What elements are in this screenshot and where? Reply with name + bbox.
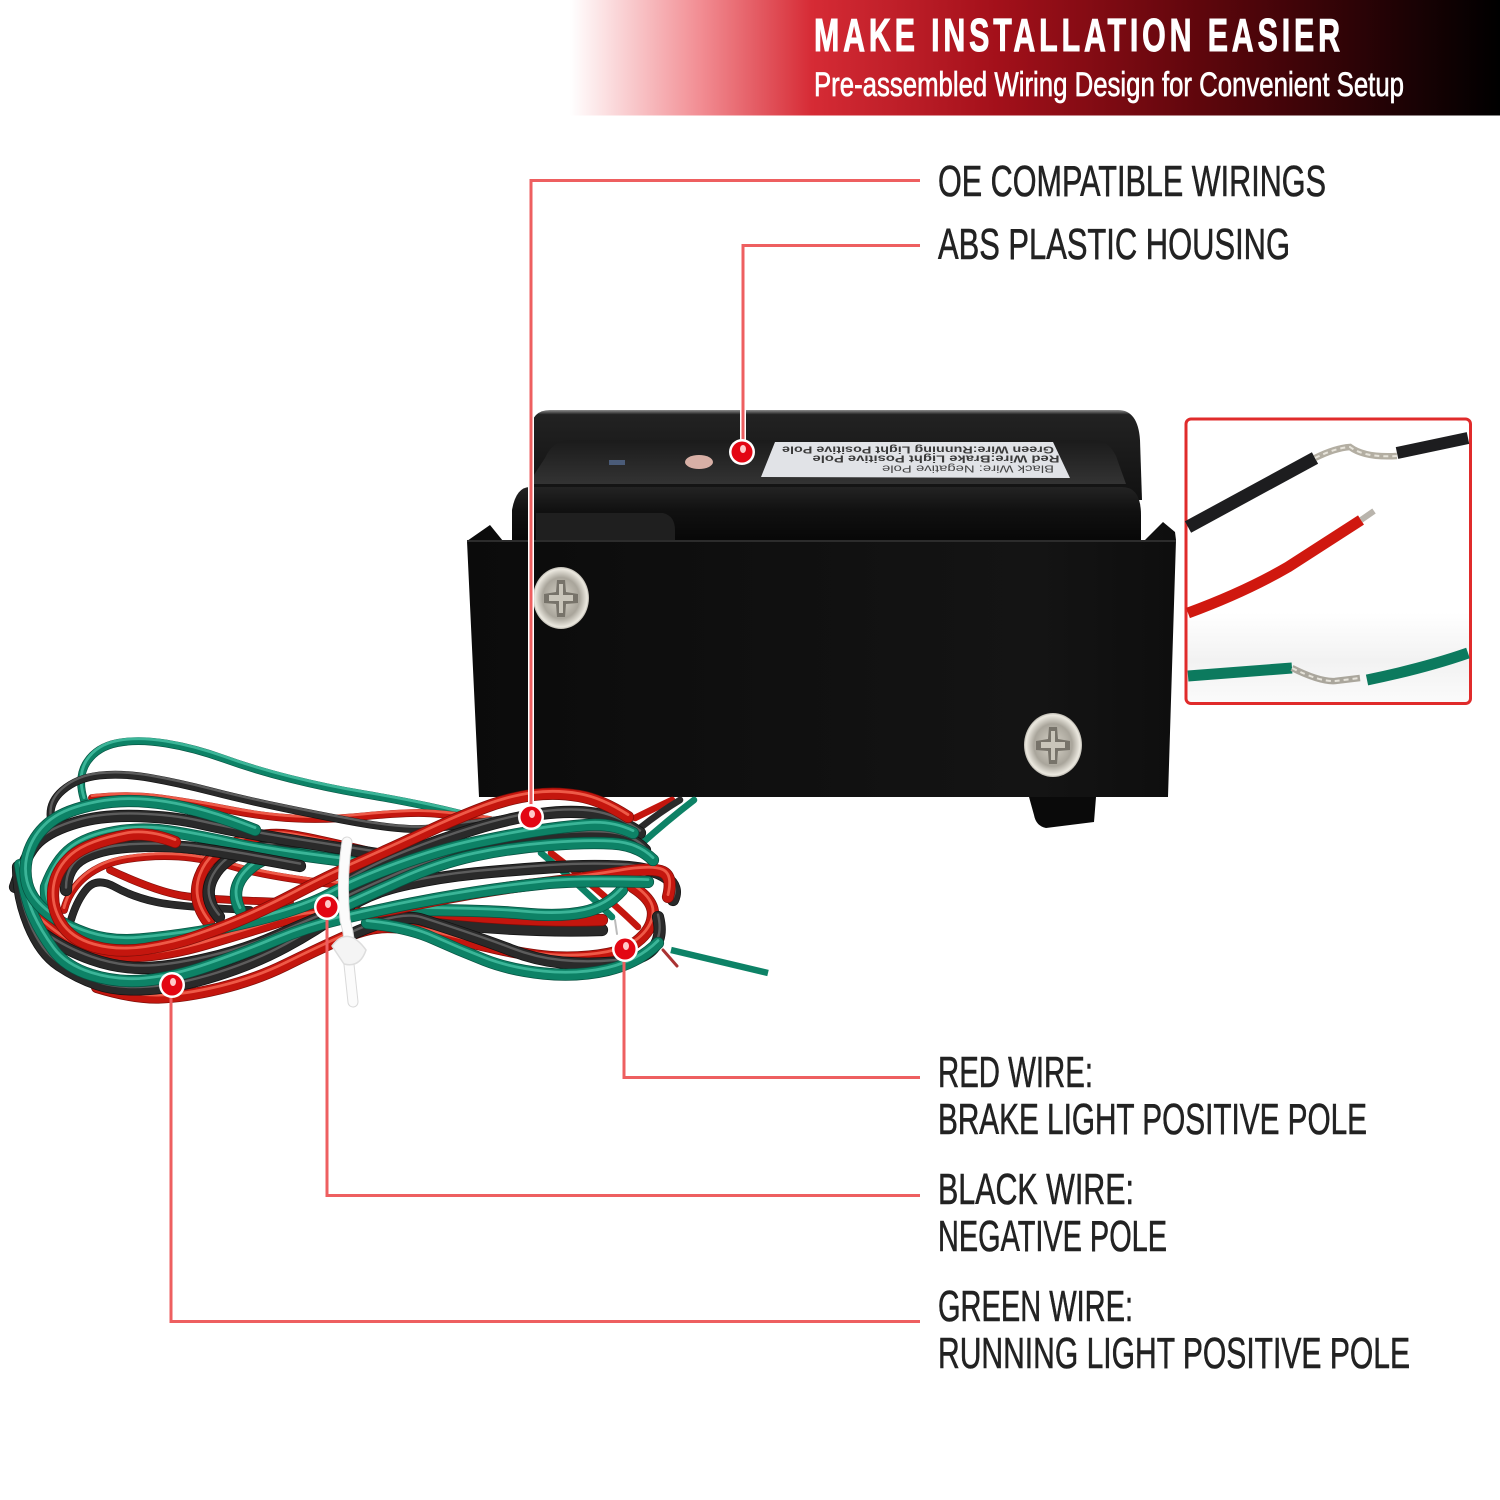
wiring label sticker xyxy=(761,442,1070,478)
white zip tie xyxy=(332,842,366,1002)
housing lower body xyxy=(512,487,1141,545)
leader line: ABS plastic housing xyxy=(743,246,920,452)
inset: stripped wire ends xyxy=(1186,419,1470,704)
red wire with tip xyxy=(1188,511,1374,613)
leader line: green wire xyxy=(171,985,920,1322)
housing top plate xyxy=(530,410,1142,500)
metal bracket front xyxy=(467,522,1176,797)
bracket top edge xyxy=(467,540,1176,542)
housing side tab xyxy=(536,513,675,545)
product: black plastic housing with metal bracket xyxy=(467,410,1176,828)
small blue tag xyxy=(609,460,625,465)
label: black wire: NEGATIVE POLE xyxy=(938,1212,1167,1261)
leader line: black wire xyxy=(327,907,920,1196)
label: green wire: GREEN WIRE: xyxy=(938,1282,1133,1331)
marker dot: green wire xyxy=(159,972,185,998)
leader line: OE compatible wirings xyxy=(531,180,920,817)
label: OE compatible wirings: OE COMPATIBLE WIRINGS xyxy=(938,157,1326,206)
marker dot: black wire xyxy=(314,894,340,920)
label: black wire xyxy=(938,1165,1167,1261)
housing lid xyxy=(528,440,1126,484)
marker dot: wirings xyxy=(518,804,544,830)
round sticker xyxy=(685,455,713,469)
screw left xyxy=(533,567,589,629)
green wire with stripped section xyxy=(1188,653,1468,681)
header banner xyxy=(570,0,1500,116)
wiring label sticker: Black Wire: Negative Pole xyxy=(882,462,1054,474)
screw right xyxy=(1024,713,1082,777)
label: green wire xyxy=(938,1282,1410,1378)
wiring label sticker: Green Wire:Running Light Positive Pole xyxy=(782,444,1054,456)
label: red wire xyxy=(938,1048,1367,1144)
label: red wire: RED WIRE: xyxy=(938,1048,1093,1097)
label: black wire: BLACK WIRE: xyxy=(938,1165,1134,1214)
black wire with stripped section xyxy=(1188,438,1468,527)
wiring label sticker: Red Wire:Brake Light Positive Pole xyxy=(812,452,1060,464)
marker dot: ABS housing xyxy=(729,439,755,465)
leader line: red wire xyxy=(624,949,920,1078)
wire bundle: red, black and green wires with zip tie xyxy=(15,739,768,1002)
label: ABS plastic housing: ABS PLASTIC HOUSING xyxy=(938,220,1290,269)
bracket bottom clip xyxy=(1029,797,1096,828)
header title: MAKE INSTALLATION EASIER xyxy=(814,11,1340,62)
cut wire end xyxy=(615,920,768,973)
marker dot: red wire xyxy=(612,936,638,962)
